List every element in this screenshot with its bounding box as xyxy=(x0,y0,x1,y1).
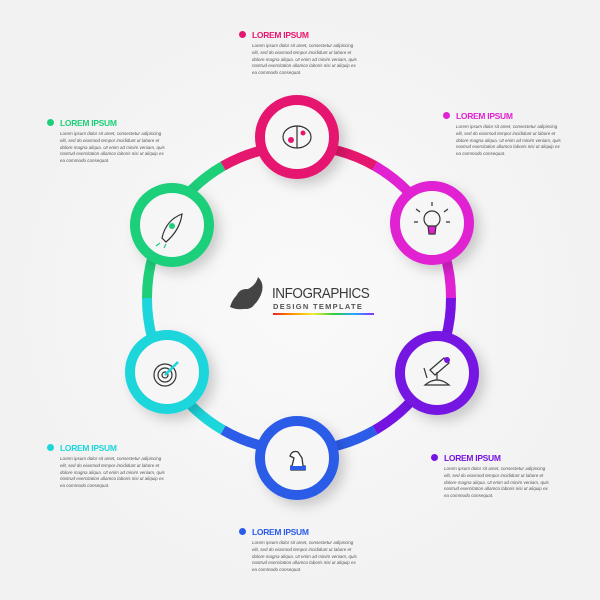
text: top right: LOREM IPSUM xyxy=(456,111,513,121)
circle: pink xyxy=(260,100,334,174)
logo: DESIGN TEMPLATE xyxy=(273,302,363,311)
icon: target xyxy=(154,362,178,386)
logo mark xyxy=(230,277,262,310)
text: bottom left xyxy=(47,443,165,488)
text: top left: LOREM IPSUM xyxy=(60,118,117,128)
text: top xyxy=(239,30,357,75)
text: bottom left: LOREM IPSUM xyxy=(60,443,117,453)
text: top right xyxy=(443,111,561,156)
text: bottom xyxy=(239,527,357,572)
circle: purple xyxy=(400,336,474,410)
icon: bulb xyxy=(414,202,450,234)
text: top: LOREM IPSUM xyxy=(252,30,309,40)
text: bottom right xyxy=(431,453,549,498)
logo xyxy=(230,277,374,315)
icon: brain xyxy=(283,126,311,148)
circle: magenta xyxy=(395,186,469,260)
text: bottom left: Lorem ipsum dolor sit amet, consectetur adipiscing elit, sed do eiusmod tempor incididunt ut labore et dolore magna aliqua. Ut enim ad minim veniam, quis nostrud exercitation ullamco laboris nisi ut aliquip ex ea commodo consequat. xyxy=(60,456,165,488)
icon: microscope xyxy=(424,357,450,385)
text: top: Lorem ipsum dolor sit amet, consectetur adipiscing elit, sed do eiusmod tempor incididunt ut labore et dolore magna aliqua. Ut enim ad minim veniam, quis nostrud exercitation ullamco laboris nisi ut aliquip ex ea commodo consequat. xyxy=(252,43,357,75)
icon: rocket xyxy=(156,214,182,248)
icon: chess knight xyxy=(290,452,306,470)
text: top left: Lorem ipsum dolor sit amet, consectetur adipiscing elit, sed do eiusmod tempor incididunt ut labore et dolore magna aliqua. Ut enim ad minim veniam, quis nostrud exercitation ullamco laboris nisi ut aliquip ex ea commodo consequat. xyxy=(60,131,165,163)
circle: cyan xyxy=(130,335,204,409)
text: bottom right: LOREM IPSUM xyxy=(444,453,501,463)
text: bottom right: Lorem ipsum dolor sit amet, consectetur adipiscing elit, sed do eiusmod tempor incididunt ut labore et dolore magna aliqua. Ut enim ad minim veniam, quis nostrud exercitation ullamco laboris nisi ut aliquip ex ea commodo consequat. xyxy=(444,466,549,498)
text: top left xyxy=(47,118,165,163)
logo text: INFOGRAPHICS xyxy=(272,285,369,302)
text: top right: Lorem ipsum dolor sit amet, consectetur adipiscing elit, sed do eiusmod tempor incididunt ut labore et dolore magna aliqua. Ut enim ad minim veniam, quis nostrud exercitation ullamco laboris nisi ut aliquip ex ea commodo consequat. xyxy=(456,124,561,156)
circle: green xyxy=(135,188,209,262)
text: bottom: Lorem ipsum dolor sit amet, consectetur adipiscing elit, sed do eiusmod tempor incididunt ut labore et dolore magna aliqua. Ut enim ad minim veniam, quis nostrud exercitation ullamco laboris nisi ut aliquip ex ea commodo consequat. xyxy=(252,540,357,572)
text: bottom: LOREM IPSUM xyxy=(252,527,309,537)
circle: blue xyxy=(260,421,334,495)
ring segments xyxy=(147,146,451,450)
